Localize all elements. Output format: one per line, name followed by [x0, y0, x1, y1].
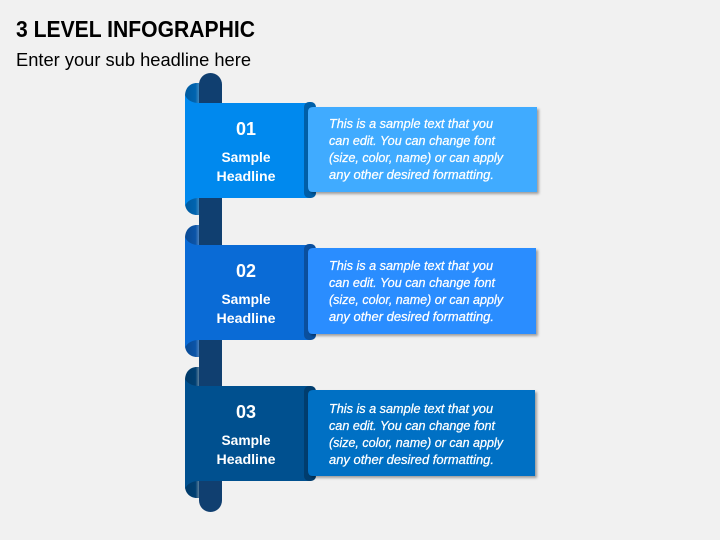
headline 2: [216, 291, 276, 326]
headline 2: Headline: [216, 310, 276, 326]
body text 1: This is a sample text that you: [329, 117, 493, 131]
body text 1: any other desired formatting.: [329, 168, 494, 182]
text box 1: [308, 107, 537, 192]
text box 3: [308, 390, 535, 476]
headline 3: Headline: [216, 451, 276, 467]
body text 2: (size, color, name) or can apply: [329, 293, 504, 307]
body text 3: (size, color, name) or can apply: [329, 436, 504, 450]
level 3: [185, 367, 535, 498]
headline 1: Sample: [222, 149, 271, 165]
ribbon band 1: [185, 95, 310, 206]
ribbon curls 3: [185, 367, 199, 498]
ribbon band 2: [185, 237, 310, 348]
ribbon band 3: [185, 379, 310, 489]
body text 3: any other desired formatting.: [329, 453, 494, 467]
band edge tab 3: [304, 386, 316, 481]
subtitle: Enter your sub headline here: [16, 50, 251, 70]
headline 3: Sample: [222, 432, 271, 448]
body text 3: can edit. You can change font: [329, 419, 496, 433]
body text 2: can edit. You can change font: [329, 276, 496, 290]
level 2: [185, 225, 536, 357]
level 1: [185, 83, 537, 215]
body text 2: This is a sample text that you: [329, 259, 493, 273]
headline 2: Sample: [222, 291, 271, 307]
number 3: 03: [236, 401, 256, 422]
body text 2: any other desired formatting.: [329, 310, 494, 324]
body text 1: can edit. You can change font: [329, 134, 496, 148]
band edge tab 2: [304, 244, 316, 340]
title: 3 LEVEL INFOGRAPHIC: [16, 16, 255, 42]
ribbon curls 2: [185, 225, 199, 357]
number 1: 01: [236, 118, 256, 139]
body text 3: This is a sample text that you: [329, 402, 493, 416]
ribbon curls 1: [185, 83, 199, 215]
vertical pole: [199, 73, 222, 512]
body text 1: [329, 117, 504, 182]
body text 2: [329, 259, 504, 324]
body text 3: [329, 402, 504, 467]
number 2: 02: [236, 260, 256, 281]
headline 1: Headline: [216, 168, 276, 184]
band edge tab 1: [304, 102, 316, 198]
headline 3: [216, 432, 276, 467]
headline 1: [216, 149, 276, 184]
body text 1: (size, color, name) or can apply: [329, 151, 504, 165]
text box 2: [308, 248, 536, 334]
